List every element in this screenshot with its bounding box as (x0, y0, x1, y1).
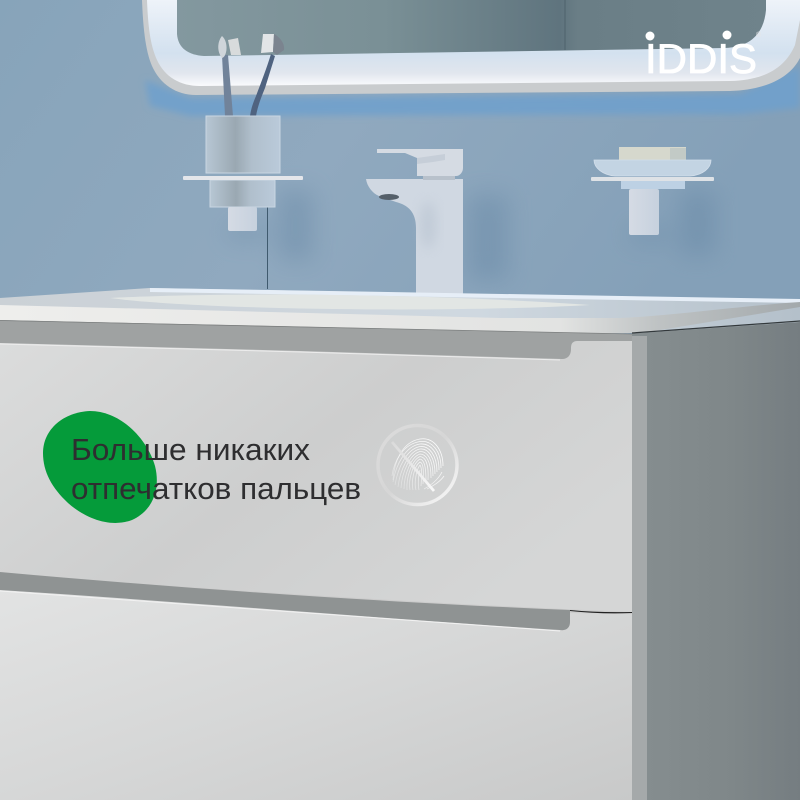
sink basin (110, 295, 590, 309)
headline text (71, 432, 361, 506)
icon ring (378, 426, 457, 504)
countertop front edge (0, 302, 800, 333)
drawer gap (570, 610, 632, 613)
mirror outer rim (142, 0, 800, 95)
logo: iddis: ® (756, 31, 762, 39)
soap dish (591, 147, 714, 235)
wall background (0, 0, 800, 340)
dish lower (621, 181, 685, 189)
cup lower (210, 180, 275, 207)
headline text: Больше никаких (71, 432, 311, 467)
faucet (366, 149, 463, 298)
dish (594, 160, 711, 176)
soap bar (619, 147, 686, 161)
icon slash (392, 442, 434, 491)
mirror (142, 0, 800, 95)
headline text: отпечатков пальцев (71, 471, 361, 506)
side panel edge strip (632, 336, 647, 800)
wall panel joint (267, 207, 268, 289)
toothbrushes (218, 34, 284, 116)
upper drawer handle recess (0, 320, 632, 359)
logo: iddis: IDDIS (645, 35, 757, 82)
faucet spout (366, 179, 463, 298)
lower drawer (0, 572, 632, 800)
cup (206, 116, 280, 173)
countertop surface (0, 288, 800, 333)
cabinet side panel (632, 310, 800, 800)
dish shelf (591, 177, 714, 181)
toothbrush left (218, 36, 241, 116)
faucet collar (423, 176, 455, 180)
cup wall mount (228, 207, 257, 231)
faucet aerator (379, 194, 399, 200)
lower drawer front (0, 590, 632, 800)
mirror glow (145, 66, 800, 116)
upper drawer (0, 320, 632, 612)
toothbrush right (250, 34, 284, 116)
dish wall mount (629, 189, 659, 235)
mirror lit frame (147, 0, 800, 86)
green blob (43, 411, 157, 523)
faucet handle (377, 149, 463, 176)
icon fingerprint (392, 439, 444, 490)
upper drawer front (0, 320, 632, 612)
mirror glass (177, 0, 766, 56)
countertop (0, 288, 800, 333)
wall shadows (228, 190, 715, 280)
icon: crossed fingerprint (378, 426, 457, 504)
lower drawer handle recess (0, 572, 570, 630)
glass cup holder (183, 116, 303, 231)
cup shelf (183, 176, 303, 180)
